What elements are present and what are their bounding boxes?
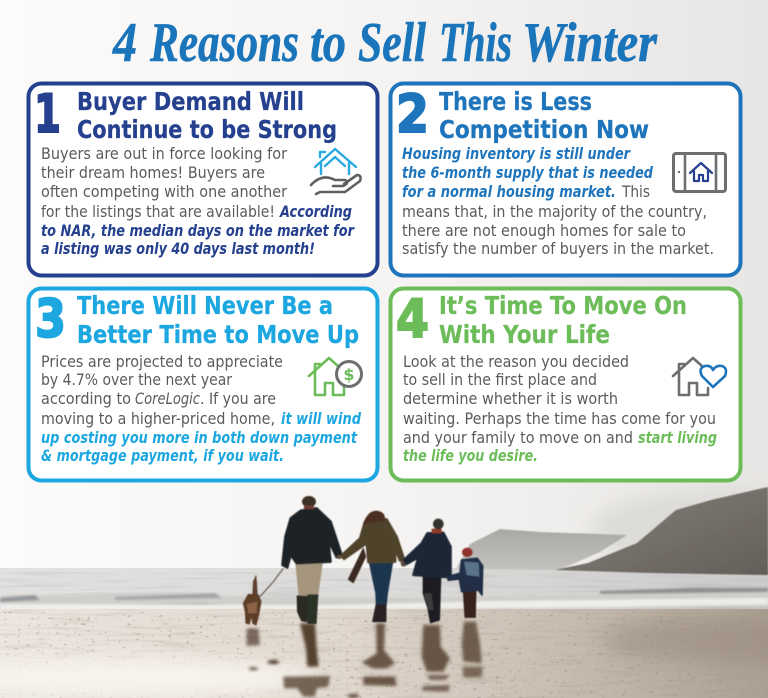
body text 2: means that, in the majority of the country, <box>402 203 707 221</box>
title: This <box>439 12 512 74</box>
number 3: 3 <box>35 289 66 350</box>
icon: house with heart <box>673 358 726 395</box>
father <box>282 496 342 623</box>
body text 3: & mortgage payment, if you wait. <box>41 447 284 465</box>
title: 4 <box>112 12 137 74</box>
panel: reason 2 less competition <box>390 84 740 276</box>
heading 4: It’s Time To Move On <box>439 291 687 320</box>
body text 3: up costing you more in both down payment <box>41 429 357 447</box>
body text 3: Prices are projected to appreciate <box>41 353 283 371</box>
reflections <box>247 622 483 698</box>
title: to <box>310 12 346 74</box>
body text 3: moving to a higher-priced home, <box>41 410 275 428</box>
beach photo <box>0 487 768 698</box>
body text 3: . If you are <box>200 390 276 408</box>
heading 3: Better Time to Move Up <box>77 320 359 349</box>
body text 1: often competing with one another <box>41 183 288 201</box>
body text 4: start living <box>638 429 717 447</box>
body text 2: the 6-month supply that is needed <box>402 164 654 182</box>
number 4: 4 <box>396 289 429 350</box>
heading 3: There Will Never Be a <box>77 291 333 320</box>
near headland <box>555 487 768 575</box>
heading 4 <box>439 291 687 349</box>
heading 1: Buyer Demand Will <box>77 87 304 116</box>
body text 1: According <box>278 203 352 221</box>
body text 1: for the listings that are available! <box>41 203 275 221</box>
body text 3 <box>41 353 362 465</box>
body text 1: their dream homes! Buyers are <box>41 164 265 182</box>
heading 4: With Your Life <box>439 320 610 349</box>
title: Sell <box>358 12 426 74</box>
number 1: 1 <box>34 84 61 145</box>
icon: tablet with house <box>674 154 726 192</box>
dog <box>243 568 283 625</box>
heading 1: Continue to be Strong <box>77 115 337 144</box>
far headland <box>456 529 627 570</box>
body text 4: the life you desire. <box>403 447 538 465</box>
wet sand <box>0 609 768 698</box>
body text 3: by 4.7% over the next year <box>41 371 233 389</box>
body text 4: determine whether it is worth <box>403 390 618 408</box>
panel: reason 3 better time to move up <box>28 288 378 480</box>
heading 2: Competition Now <box>439 115 649 144</box>
icon: house with dollar coin <box>309 358 362 395</box>
body text 4: waiting. Perhaps the time has come for you <box>403 410 716 428</box>
body text 1: Buyers are out in force looking for <box>41 145 288 163</box>
body text 3: CoreLogic <box>135 390 200 408</box>
body text 4: and your family to move on and <box>403 429 633 447</box>
body text 3: it will wind <box>281 410 362 428</box>
son <box>404 519 451 623</box>
panel: reason 1 buyer demand <box>28 84 378 276</box>
panel: reason 4 move on with your life <box>390 288 740 480</box>
mother <box>336 511 407 622</box>
title: Reasons <box>149 12 299 74</box>
body text 4: Look at the reason you decided <box>403 353 629 371</box>
heading 2: There is Less <box>439 87 592 116</box>
heading 1 <box>77 87 337 144</box>
icon: house with dollar coin: $ <box>343 365 355 384</box>
body text 2: This <box>621 183 650 201</box>
body text 1: a listing was only 40 days last month! <box>41 240 315 258</box>
heading 2 <box>439 87 649 144</box>
title: Winter <box>522 12 658 74</box>
body text 2: for a normal housing market. <box>402 183 616 201</box>
icon: house in hand <box>311 149 361 194</box>
family walking with dog <box>243 496 483 625</box>
heading 3 <box>77 291 359 349</box>
daughter <box>447 548 483 617</box>
body text 4 <box>403 353 717 465</box>
body text 2: satisfy the number of buyers in the market. <box>402 240 714 258</box>
number 2: 2 <box>396 84 429 145</box>
body text 4: to sell in the first place and <box>403 371 597 389</box>
body text 3: according to <box>41 390 131 408</box>
body text 2 <box>402 145 714 258</box>
body text 1: to NAR, the median days on the market for <box>41 222 355 240</box>
title <box>112 12 658 74</box>
sea <box>0 568 768 612</box>
waves <box>0 588 768 611</box>
body text 2: there are not enough homes for sale to <box>402 222 686 240</box>
body text 1 <box>41 145 355 258</box>
body text 2: Housing inventory is still under <box>402 145 631 163</box>
